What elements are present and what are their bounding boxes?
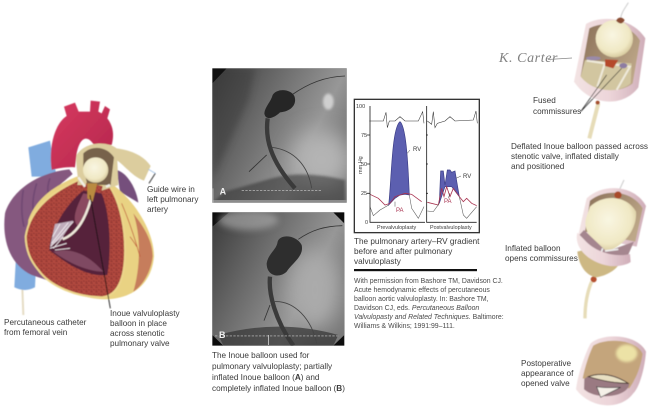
label: postoperative: appearance of [521, 369, 574, 378]
caption: x-ray: inflated Inoue balloon (A) and [212, 373, 320, 382]
valve cylinder [574, 19, 645, 102]
chart: pressure tracings [354, 99, 479, 233]
signature: K. Carter [498, 51, 558, 66]
chart labels: PA [444, 199, 452, 205]
credit text: Valvulopasty and Related Techniques. Baltimore: [354, 314, 504, 321]
caption: chart [354, 237, 480, 266]
caption: deflated balloon [511, 142, 648, 171]
label: Inoue balloon: balloon in place [110, 319, 167, 328]
caption: deflated balloon: stenotic valve, inflated distally [511, 152, 620, 161]
label: Inoue balloon [110, 309, 181, 348]
letter B: B [219, 330, 226, 340]
caption: deflated balloon: Deflated Inoue balloon passed across [511, 142, 648, 151]
right atrium [4, 169, 73, 280]
x-ray B [212, 210, 344, 346]
chart labels: mm Hg [358, 156, 364, 174]
chart labels: RV [463, 174, 471, 180]
credit text: With permission from Bashore TM, Davidson CJ. [354, 278, 503, 285]
label: postoperative [521, 359, 574, 388]
chart labels: Postvalvuloplasty [430, 225, 472, 231]
caption: chart: The pulmonary artery–RV gradient [354, 237, 480, 246]
caption: chart: valvuloplasty [354, 257, 402, 266]
aorta [51, 101, 113, 170]
label: postoperative: opened valve [521, 379, 570, 388]
illustration: inflated balloon [577, 180, 646, 318]
chart labels: 25 [361, 191, 367, 197]
label: guide wire [147, 185, 199, 214]
credit text: Williams & Wilkins; 1991:99–111. [354, 323, 455, 330]
illustration: heart with catheter [4, 101, 155, 315]
label: Inoue balloon: across stenotic [110, 329, 165, 338]
label: guide wire: left pulmonary [147, 195, 199, 204]
chart labels: RV [413, 147, 421, 153]
label: fused commissures: Fused [533, 96, 556, 105]
label: inflated balloon [505, 244, 578, 263]
chart labels: Prevalvuloplasty [377, 225, 417, 231]
label: Inoue balloon: Inoue valvuloplasty [110, 309, 181, 318]
illustration: opened valve [576, 336, 646, 405]
label: inflated balloon: opens commissures [505, 254, 578, 263]
label: inflated balloon: Inflated balloon [505, 244, 561, 253]
credit text: Davidson CJ, eds. Percutaneous Balloon [354, 305, 479, 312]
label: guide wire: artery [147, 205, 169, 214]
label: Inoue balloon: pulmonary valve [110, 339, 170, 348]
letter A: A [220, 187, 227, 197]
chart labels: 100 [356, 104, 365, 110]
ECG [369, 111, 477, 128]
chart labels: 0 [365, 220, 368, 226]
guide wire [148, 169, 155, 173]
chart labels: PA [396, 208, 404, 214]
axes [367, 106, 477, 222]
caption: x-ray [212, 351, 345, 393]
left appendage [117, 170, 138, 203]
RV area after [439, 170, 459, 203]
label: guide wire: Guide wire in [147, 185, 195, 194]
caption: x-ray: The Inoue balloon used for [212, 351, 310, 360]
caption: chart: before and after pulmonary [354, 247, 453, 256]
ventricle cavity [49, 191, 110, 275]
credit text [354, 278, 504, 330]
leader lines [581, 68, 622, 112]
catheter [63, 200, 91, 239]
label: fused commissures: commissures [533, 107, 581, 116]
chart labels: 75 [361, 133, 367, 139]
label: percutaneous catheter: Percutaneous catheter [4, 318, 87, 327]
label: percutaneous catheter: from femoral vein [4, 328, 68, 337]
balloon [605, 59, 618, 68]
label: percutaneous catheter [4, 318, 87, 337]
PA tracings [370, 187, 477, 206]
pulmonary artery [76, 144, 151, 191]
credit text: balloon aortic valvuloplasty. In: Bashore TM, [354, 296, 489, 303]
balloon [87, 183, 97, 202]
chordae [50, 221, 73, 247]
heart wall [27, 177, 154, 299]
chart labels: 50 [361, 162, 367, 168]
RV area before [389, 122, 409, 205]
chart leader lines [395, 150, 461, 207]
RV tail tracings [370, 195, 477, 218]
label: postoperative: Postoperative [521, 359, 572, 368]
caption: x-ray: pulmonary valvuloplasty; partially [212, 362, 333, 371]
label: fused commissures [533, 96, 581, 116]
caption: x-ray: completely inflated Inoue balloon (B) [212, 384, 345, 393]
caption: deflated balloon: and positioned [511, 162, 565, 171]
muscle wall [26, 180, 125, 297]
credit text: Acute hemodynamic effects of percutaneous [354, 287, 490, 294]
leader lines [90, 173, 155, 308]
x-ray A [212, 68, 352, 203]
icon: vena cava [14, 141, 57, 290]
chart labels [356, 104, 472, 231]
illustration: deflated balloon valve [574, 3, 645, 138]
